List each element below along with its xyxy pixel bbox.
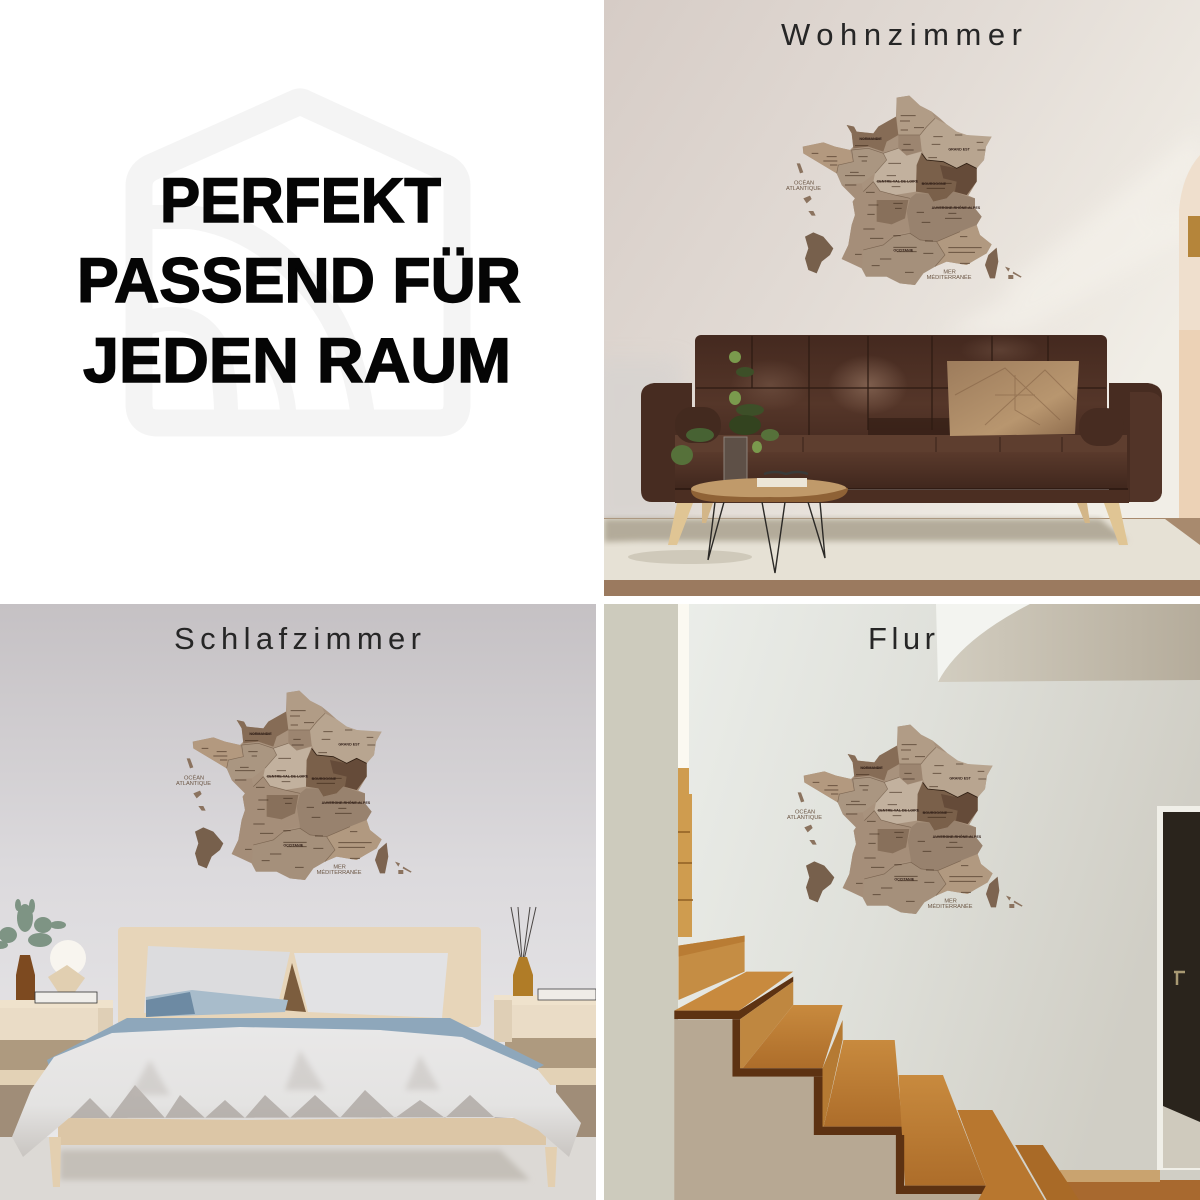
caption: Flur: Flur	[868, 621, 935, 656]
logo watermark: house	[139, 102, 457, 423]
door	[1157, 806, 1200, 1170]
France map: hallway: MÉDITERRANÉE	[928, 903, 973, 910]
France map: hallway: OCCITANIE	[894, 878, 915, 882]
France map: living room: BOURGOGNE	[922, 182, 947, 186]
France map: living room: ATLANTIQUE	[786, 186, 821, 192]
bed	[12, 927, 581, 1187]
France map: hallway: NORMANDIE	[860, 766, 883, 770]
staircase	[674, 936, 1079, 1200]
left pillar and window strip	[604, 604, 693, 1200]
parquet and skirting	[1060, 1170, 1200, 1200]
France map: hallway: CENTRE-VAL DE LOIRE	[878, 808, 920, 812]
France map: bedroom: OCÉAN	[184, 774, 204, 781]
sofa	[641, 334, 1162, 545]
France map: living room: CENTRE-VAL DE LOIRE	[877, 179, 919, 183]
France map: bedroom: BOURGOGNE	[312, 777, 337, 781]
headline	[77, 166, 521, 396]
floor and rug	[604, 518, 1200, 596]
France map: living room: MÉDITERRANÉE	[927, 274, 972, 281]
France map: hallway: BOURGOGNE	[923, 811, 948, 815]
France map: bedroom	[176, 691, 412, 880]
France map: hallway: GRAND EST	[949, 776, 972, 780]
France map: hallway	[787, 725, 1023, 914]
France map: bedroom: CENTRE-VAL DE LOIRE	[267, 774, 309, 778]
plant in vase	[671, 351, 779, 483]
France map: hallway: AUVERGNE-RHÔNE-ALPES	[933, 834, 982, 839]
France map: living room: OCCITANIE	[893, 249, 914, 253]
nightstand: left	[0, 1000, 113, 1085]
headline: JEDEN RAUM	[83, 326, 511, 396]
France map: hallway: MER	[944, 898, 957, 904]
panel: Schlafzimmer	[0, 604, 596, 1200]
panel: Flur	[604, 604, 1200, 1200]
France map: bedroom: MÉDITERRANÉE	[317, 869, 362, 876]
France map: living room: MER	[943, 269, 956, 275]
France map: bedroom: ATLANTIQUE	[176, 781, 211, 787]
caption: Schlafzimmer: Schlafzimmer	[174, 621, 421, 656]
France map: living room: GRAND EST	[948, 147, 971, 151]
France map: bedroom: GRAND EST	[338, 742, 361, 746]
panel: Wohnzimmer	[590, 0, 1200, 596]
France map: bedroom: AUVERGNE-RHÔNE-ALPES	[322, 800, 371, 805]
coffee table	[691, 472, 848, 573]
France map: living room: AUVERGNE-RHÔNE-ALPES	[932, 205, 981, 210]
France map: hallway: OCÉAN	[795, 808, 815, 815]
France map: living room	[786, 96, 1022, 285]
reed diffuser and books	[511, 907, 596, 1000]
vase with eucalyptus, lamp and books	[0, 899, 97, 1003]
headline: PASSEND FÜR	[77, 246, 521, 316]
caption: Wohnzimmer: Wohnzimmer	[781, 17, 1022, 52]
panel: title with logo watermark	[0, 0, 596, 596]
France map: hallway: ATLANTIQUE	[787, 815, 822, 821]
France map: bedroom: OCCITANIE	[283, 844, 304, 848]
France map: bedroom: NORMANDIE	[249, 732, 272, 736]
headline: PERFEKT	[160, 166, 441, 236]
icon: wall sconce	[1188, 216, 1200, 257]
arched ceiling	[936, 604, 1200, 682]
France map: bedroom: MER	[333, 864, 346, 870]
nightstand: right	[494, 995, 596, 1085]
France map: living room: NORMANDIE	[859, 137, 882, 141]
France map: living room: OCÉAN	[794, 179, 814, 186]
